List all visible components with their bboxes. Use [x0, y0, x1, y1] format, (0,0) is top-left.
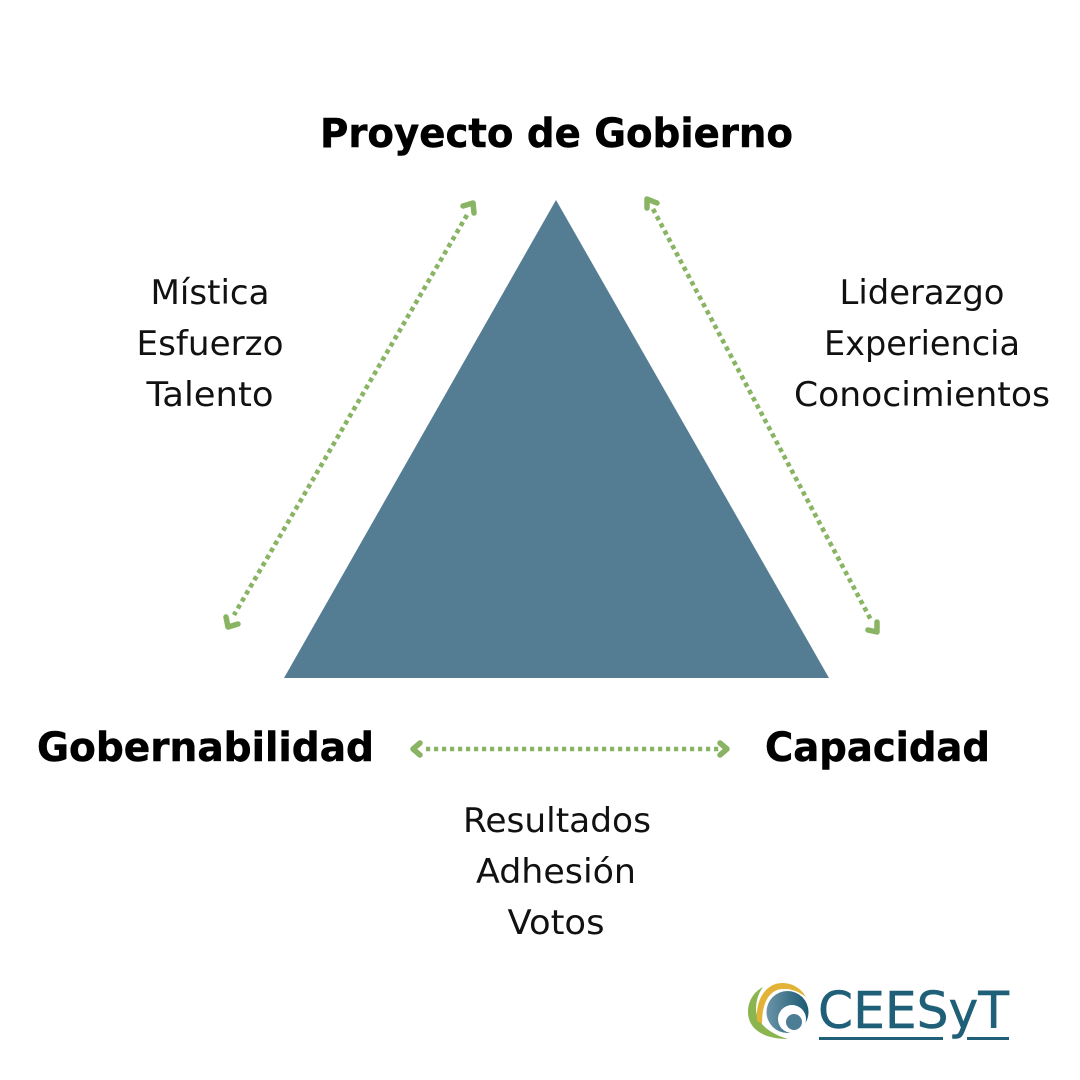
- logo wordmark: CEESyT: [818, 982, 1010, 1041]
- title: Proyecto de Gobierno: Proyecto de Gobierno: [320, 111, 793, 157]
- label: Capacidad: Capacidad: [765, 725, 990, 771]
- arrow: right double-headed dotted: [647, 199, 877, 632]
- text block: right side list: [794, 273, 1050, 414]
- logo: CEESyT: [748, 982, 1010, 1041]
- text block: right side list: Conocimientos: [794, 375, 1050, 414]
- text block: bottom list: Votos: [508, 903, 604, 942]
- text block: bottom list: Resultados: [463, 801, 651, 840]
- logo underline: [819, 1037, 1009, 1040]
- central triangle: [284, 200, 829, 678]
- label: Gobernabilidad: Gobernabilidad: [37, 725, 374, 771]
- text block: left side list: Mística: [150, 273, 270, 312]
- text block: right side list: Liderazgo: [840, 273, 1004, 312]
- arrow: left double-headed dotted: [226, 203, 474, 627]
- text block: bottom list: [463, 801, 651, 942]
- text block: bottom list: Adhesión: [476, 852, 636, 891]
- text block: left side list: Talento: [145, 375, 274, 414]
- text block: left side list: [136, 273, 284, 414]
- text block: right side list: Experiencia: [824, 324, 1020, 363]
- arrow: bottom double-headed dotted: [413, 743, 727, 755]
- icon: logo swirl: [748, 983, 808, 1039]
- text block: left side list: Esfuerzo: [136, 324, 284, 363]
